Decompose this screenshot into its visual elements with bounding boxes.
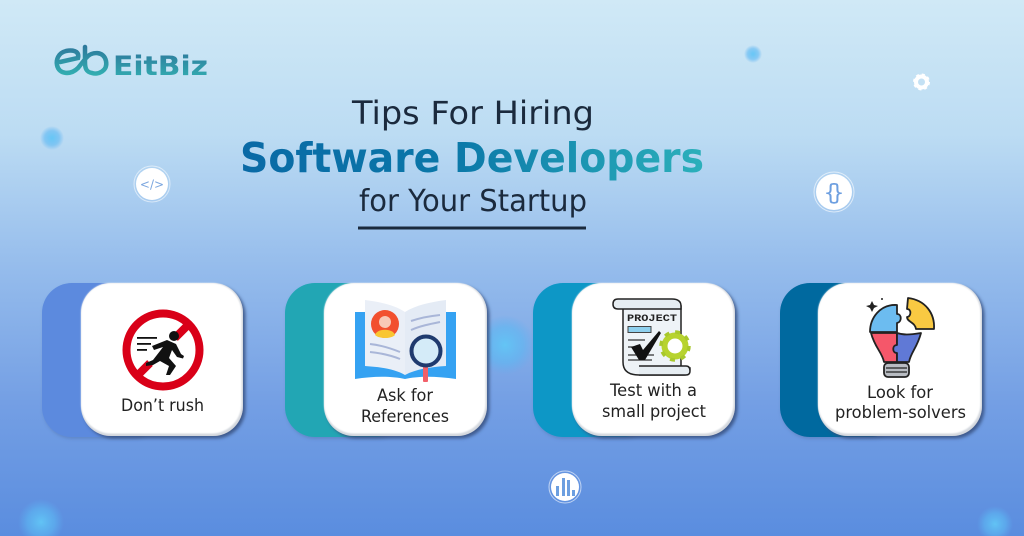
title underline [358,226,586,230]
title line 1: Tips For Hiring [351,94,594,132]
icon: gear [914,74,929,90]
icon: bar chart badge [549,471,581,503]
label: References [361,407,449,426]
panel: don't rush [42,283,243,437]
card front [81,283,243,436]
logo: EitBiz [57,47,208,82]
label: problem-solvers [835,403,966,422]
icon: no running [126,314,200,386]
label [602,381,707,421]
label: Ask for [377,386,433,405]
card back [42,283,162,437]
label: small project [602,402,707,421]
icon: code tag badge: </> [140,178,164,192]
icon: curly braces badge [814,172,854,212]
icon: curly braces badge: { } [824,181,844,206]
title line 2: Software Developers [240,134,704,182]
icon: project scroll [613,299,690,375]
title line 3: for Your Startup [359,184,587,219]
icon: code tag badge [134,166,170,202]
icon: puzzle light bulb [866,298,934,377]
label: Test with a [609,381,697,400]
label: Don’t rush [121,396,204,415]
panel: test with a small project [533,283,735,437]
panel: ask for references [285,283,487,437]
logo mark [57,47,106,74]
label: Look for [867,383,933,402]
card front [572,283,735,436]
icon: open book with magnifier [355,300,456,382]
card back [285,283,405,437]
icon: project scroll: PROJECT [627,314,677,325]
panel: look for problem-solvers [780,283,982,437]
card back [533,283,653,437]
logo wordmark: EitBiz [113,51,208,82]
label [835,383,966,422]
card front [324,283,487,436]
title [240,94,704,230]
card back [780,283,900,437]
card front [818,283,982,436]
label [361,386,449,426]
